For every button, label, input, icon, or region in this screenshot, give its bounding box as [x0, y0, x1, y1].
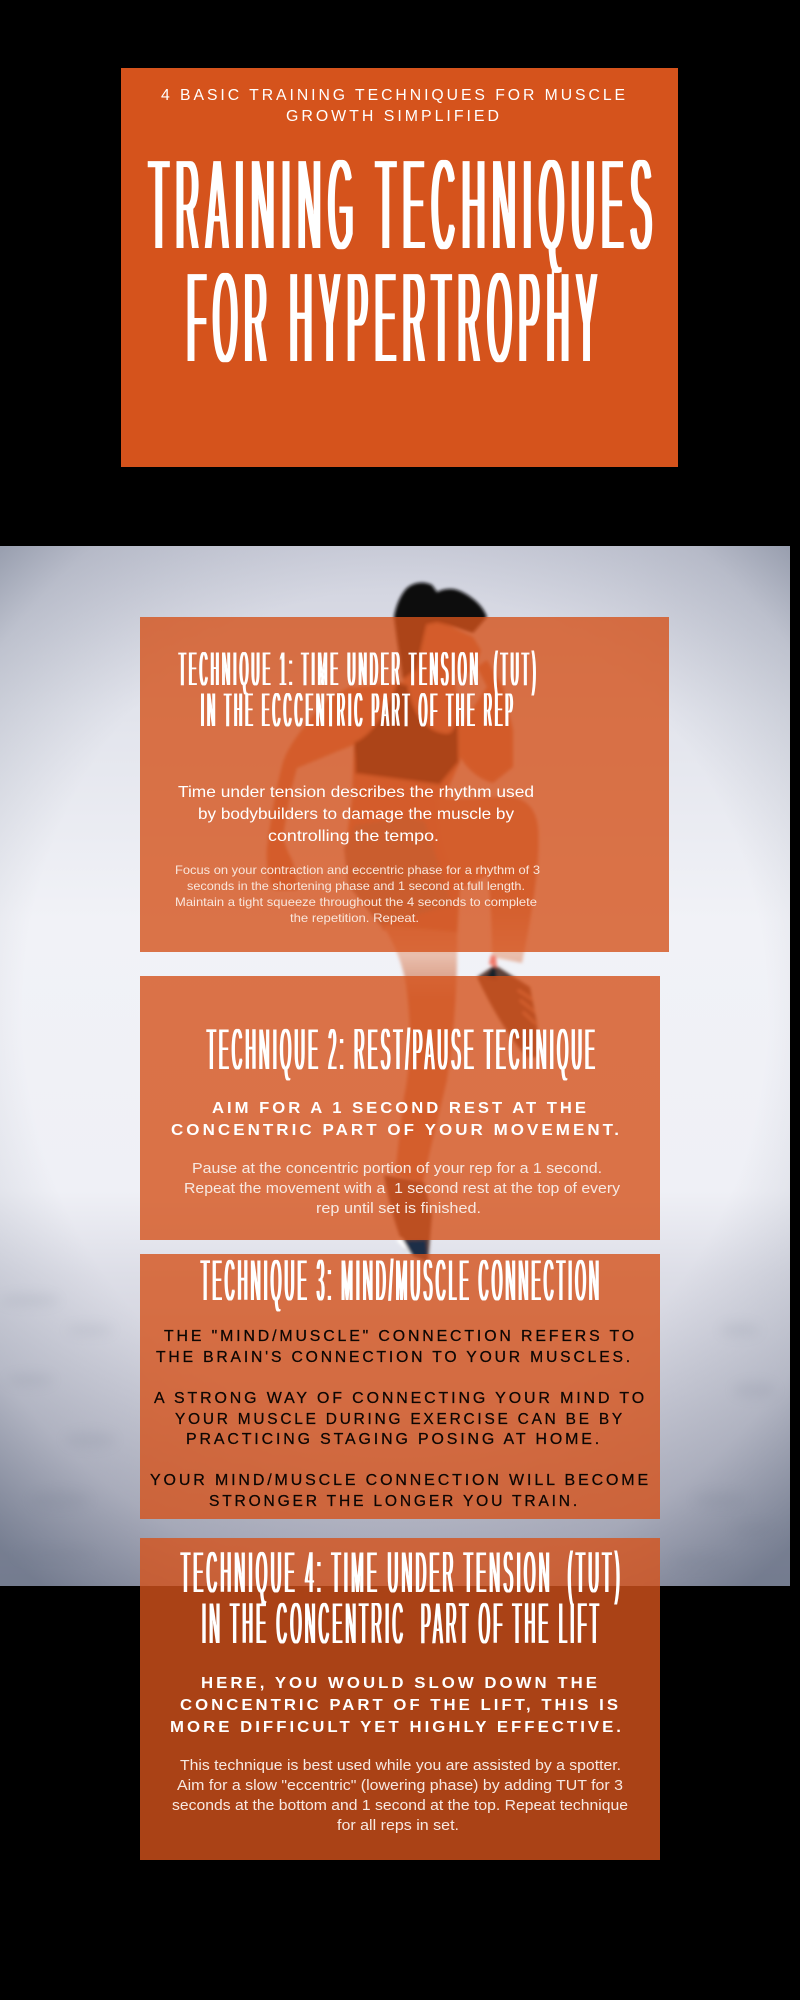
- technique 3 text: PRACTICING STAGING POSING AT HOME.: [186, 1431, 602, 1448]
- technique 2 key point: [171, 1100, 622, 1139]
- technique 2 key point: AIM FOR A 1 SECOND REST AT THE: [212, 1100, 589, 1117]
- standing shoe: [384, 1175, 432, 1262]
- technique 3 text: [150, 1328, 651, 1510]
- left arm: [267, 686, 356, 890]
- technique 2 detail text: rep until set is finished.: [316, 1200, 481, 1217]
- technique 4 key point: MORE DIFFICULT YET HIGHLY EFFECTIVE.: [170, 1719, 624, 1736]
- panel: title: [121, 68, 678, 467]
- technique 1 background: [140, 617, 669, 952]
- technique 2 background: [140, 976, 660, 1240]
- technique 1 detail text: the repetition. Repeat.: [290, 911, 419, 925]
- raised shoe: [477, 955, 538, 1058]
- photo backdrop: [0, 546, 790, 1586]
- hair with ponytail: [394, 583, 487, 680]
- technique 1 detail text: Focus on your contraction and eccentric phase for a rhythm of 3: [175, 863, 540, 877]
- photo: woman running on foggy ground: [0, 546, 790, 1586]
- standing leg: [383, 925, 457, 1182]
- technique 3 text: THE "MIND/MUSCLE" CONNECTION REFERS TO: [164, 1328, 637, 1345]
- head: [420, 622, 481, 676]
- right arm and fist: [460, 660, 513, 783]
- raised thigh and shin: [436, 797, 539, 963]
- technique 3 text: A STRONG WAY OF CONNECTING YOUR MIND TO: [154, 1390, 647, 1407]
- technique 2 detail text: Pause at the concentric portion of your rep for a 1 second.: [192, 1160, 602, 1177]
- technique 4 detail text: seconds at the bottom and 1 second at the top. Repeat technique: [172, 1797, 628, 1814]
- main title: [149, 131, 659, 391]
- technique 3 background: [140, 1254, 660, 1519]
- panel: technique 1: [140, 617, 669, 952]
- technique 4 detail text: for all reps in set.: [337, 1817, 459, 1834]
- panel: technique 4: [140, 1538, 660, 1860]
- sports bra: [354, 682, 459, 785]
- torso: [346, 674, 462, 932]
- technique 2 detail text: [184, 1160, 621, 1217]
- technique 4 background: [140, 1538, 660, 1860]
- technique 4 heading: [181, 1539, 623, 1657]
- technique 2 detail text: Repeat the movement with a 1 second rest at the top of every: [184, 1180, 621, 1197]
- technique 1 intro text: by bodybuilders to damage the muscle by: [198, 806, 514, 823]
- technique 4 key point: [170, 1675, 624, 1736]
- title panel background: [121, 68, 678, 467]
- technique 3 text: STRONGER THE LONGER YOU TRAIN.: [209, 1493, 580, 1510]
- technique 1 intro text: Time under tension describes the rhythm used: [178, 784, 534, 801]
- technique 1 intro text: [178, 784, 534, 845]
- technique 3 text: THE BRAIN'S CONNECTION TO YOUR MUSCLES.: [156, 1349, 633, 1366]
- technique 1 heading: [179, 641, 539, 738]
- panel: technique 2: [140, 976, 660, 1240]
- subtitle: 4 BASIC TRAINING TECHNIQUES FOR MUSCLE: [161, 87, 628, 104]
- technique 2 key point: CONCENTRIC PART OF YOUR MOVEMENT.: [171, 1122, 622, 1139]
- technique 4 key point: HERE, YOU WOULD SLOW DOWN THE: [201, 1675, 600, 1692]
- technique 4 detail text: This technique is best used while you are assisted by a spotter.: [180, 1757, 621, 1774]
- technique 4 detail text: [172, 1757, 628, 1834]
- shorts: [344, 817, 452, 925]
- technique 4 detail text: Aim for a slow "eccentric" (lowering phase) by adding TUT for 3: [177, 1777, 623, 1794]
- subtitle: [161, 87, 628, 125]
- woman figure: [267, 583, 539, 1262]
- technique 1 detail text: [175, 863, 540, 925]
- technique 1 detail text: seconds in the shortening phase and 1 second at full length.: [187, 879, 525, 893]
- technique 3 text: YOUR MIND/MUSCLE CONNECTION WILL BECOME: [150, 1472, 651, 1489]
- panel: technique 3: [140, 1247, 660, 1519]
- technique 3 text: YOUR MUSCLE DURING EXERCISE CAN BE BY: [175, 1411, 625, 1428]
- technique 1 detail text: Maintain a tight squeeze throughout the 4 seconds to complete: [175, 895, 537, 909]
- technique 1 intro text: controlling the tempo.: [268, 828, 439, 845]
- subtitle: GROWTH SIMPLIFIED: [286, 108, 502, 125]
- technique 4 key point: CONCENTRIC PART OF THE LIFT, THIS IS: [180, 1697, 621, 1714]
